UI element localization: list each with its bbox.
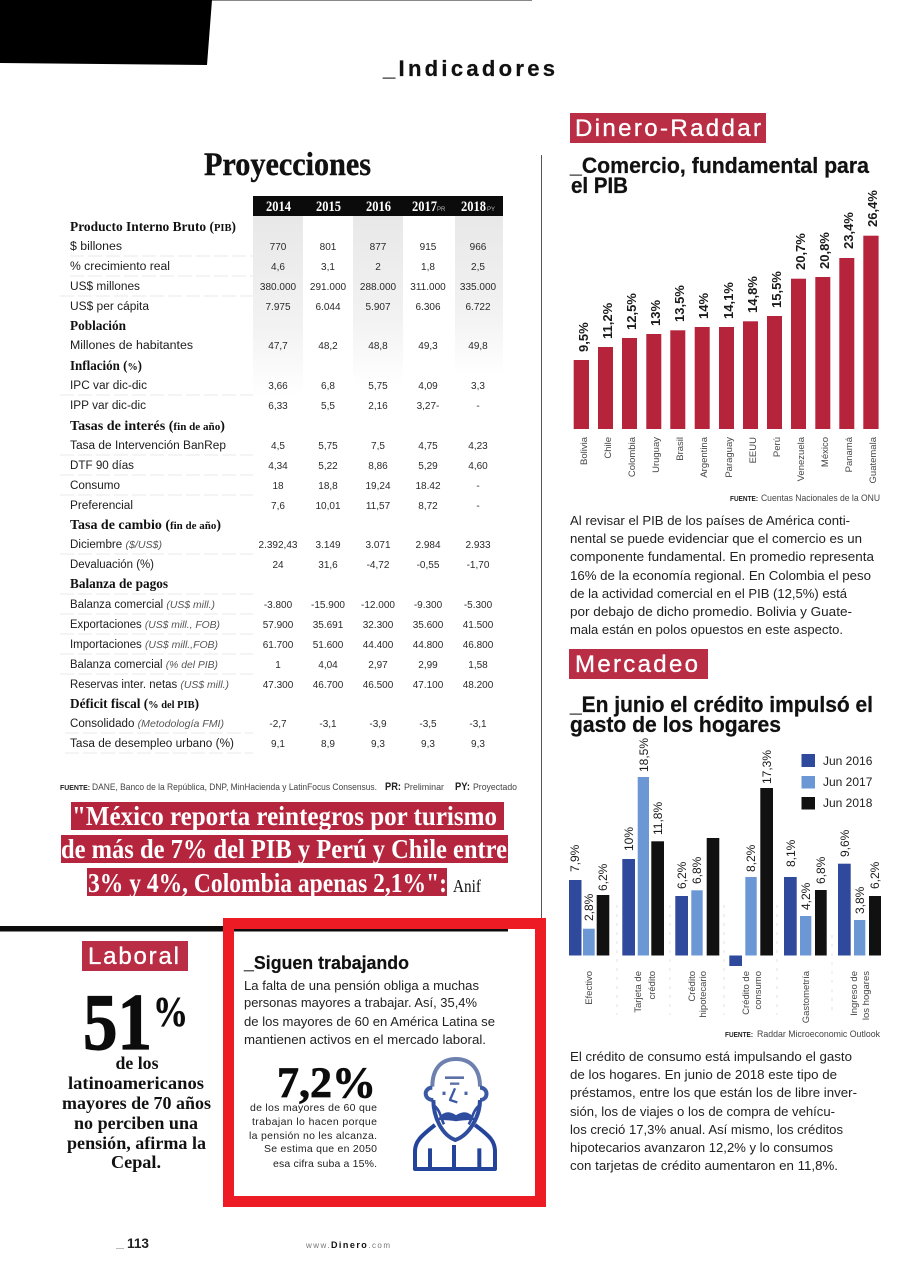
table source note — [60, 781, 517, 793]
section: balanza de pagos: 2,99 — [418, 660, 438, 671]
country labels — [579, 436, 879, 483]
callout: quote — [61, 801, 508, 898]
paragraph: comercio: por debajo de dicho promedio. Bolivia y Guate- — [570, 604, 852, 619]
section: deficit fiscal: -3,1 — [319, 719, 337, 730]
section: poblacion — [70, 319, 488, 352]
big number 51%: 51 — [83, 979, 152, 1067]
value labels: 6,8% — [690, 856, 704, 884]
laboral text: Cepal. — [111, 1152, 161, 1172]
panel: comercio — [569, 153, 880, 637]
country labels: Uruguay — [651, 437, 662, 473]
section: poblacion: 49,8 — [468, 341, 488, 352]
section: producto interno bruto: 6.722 — [465, 302, 491, 313]
stat description: trabajan lo hacen porque — [252, 1116, 377, 1128]
section: deficit fiscal: -2,7 — [269, 719, 287, 730]
stat description: la pensión no les alcanza. — [249, 1130, 377, 1142]
section: tasas de interes: DTF 90 días — [70, 460, 134, 472]
section: tasa de cambio: 2.392,43 — [259, 540, 298, 551]
section: inflacion: 3,27- — [417, 401, 439, 412]
section: producto interno bruto: 291.000 — [310, 282, 347, 293]
section: inflacion: 6,8 — [321, 381, 335, 392]
section: poblacion: Población — [70, 319, 126, 334]
tab: mercadeo: Mercadeo — [575, 651, 698, 678]
table header: 2014 — [266, 199, 291, 215]
value labels: 8,1% — [784, 839, 798, 867]
bar chart: credito — [568, 738, 882, 1023]
section: tasas de interes: - — [476, 501, 480, 512]
laboral text: latinoamericanos — [68, 1073, 204, 1093]
section: deficit fiscal — [70, 697, 487, 750]
table source note: Proyectado — [473, 782, 517, 793]
section: producto interno bruto: 380.000 — [260, 282, 297, 293]
big number 51%: % — [153, 990, 188, 1036]
section: tasa de cambio: Devaluación (%) — [70, 559, 154, 571]
panel: siguen trabajando — [228, 924, 540, 1202]
section: inflacion: 5,75 — [368, 381, 388, 392]
laboral text — [62, 1053, 211, 1172]
tab: dinero-raddar: Dinero-Raddar — [575, 115, 761, 142]
country labels: Guatemala — [868, 436, 879, 483]
footer url: www.Dinero.com — [305, 1240, 390, 1250]
table header: 2018 — [461, 199, 486, 215]
chart source: FUENTE: — [725, 1030, 753, 1039]
section: tasas de interes: Preferencial — [70, 500, 133, 512]
section: producto interno bruto: 311.000 — [410, 282, 446, 293]
section: inflacion: 3,3 — [471, 381, 485, 392]
chart source: Cuentas Nacionales de la ONU — [761, 493, 880, 504]
intro text: La falta de una pensión obliga a muchas — [244, 978, 479, 993]
section: balanza de pagos: 2,97 — [368, 660, 388, 671]
chart source: Raddar Microeconomic Outlook — [757, 1029, 880, 1040]
section: producto interno bruto: 2,5 — [471, 262, 485, 273]
stat description: esa cifra suba a 15%. — [273, 1158, 377, 1170]
value labels: 12,5% — [624, 293, 639, 330]
country labels: Colombia — [627, 436, 638, 477]
table shading — [253, 216, 503, 396]
section: balanza de pagos: Balanza comercial (% del PIB) — [70, 659, 218, 671]
section: tasa de cambio: 24 — [272, 560, 284, 571]
value labels: 14,8% — [745, 276, 760, 313]
category labels: Gastometría — [801, 970, 812, 1023]
section: inflacion: Inflación (%) — [70, 359, 142, 374]
section: poblacion: 48,2 — [318, 341, 338, 352]
value labels: 3,8% — [853, 886, 867, 914]
legend: Jun 2018 — [823, 796, 873, 810]
country labels: México — [820, 437, 831, 467]
stat description: de los mayores de 60 que — [250, 1102, 377, 1114]
value labels — [568, 738, 882, 921]
value labels: 15,5% — [769, 271, 784, 308]
section: deficit fiscal: 9,1 — [271, 739, 285, 750]
section: producto interno bruto — [70, 220, 497, 313]
bars jun 2018 — [597, 788, 881, 956]
country labels: Paraguay — [724, 437, 735, 478]
section: inflacion: IPP var dic-dic — [70, 400, 146, 412]
value labels: 10% — [622, 827, 636, 851]
section: poblacion: 47,7 — [268, 341, 288, 352]
value labels: 26,4% — [865, 190, 880, 227]
intro text: mantienen activos en el mercado laboral. — [244, 1032, 486, 1047]
category labels: Crédito — [687, 971, 698, 1002]
chart source: FUENTE: — [730, 494, 758, 503]
laboral text: de los — [116, 1053, 158, 1073]
section: balanza de pagos: 1 — [275, 660, 281, 671]
page number: 113 — [127, 1235, 149, 1251]
section: tasa de cambio — [70, 518, 491, 571]
group separators — [617, 905, 832, 1015]
heading: credito: gasto de los hogares — [570, 712, 781, 737]
section: tasas de interes: 18,8 — [318, 481, 338, 492]
red frame — [228, 924, 540, 1202]
section: deficit fiscal: 9,3 — [471, 739, 485, 750]
stat description: Se estima que en 2050 — [264, 1143, 377, 1155]
value labels: 9,6% — [838, 829, 852, 857]
section: producto interno bruto: 877 — [370, 242, 387, 253]
section: tasas de interes: 18.42 — [415, 481, 441, 492]
value labels: 17,3% — [760, 750, 774, 784]
section: balanza de pagos: 51.600 — [313, 640, 344, 651]
section: producto interno bruto: 1,8 — [421, 262, 435, 273]
section: producto interno bruto: $ billones — [70, 241, 122, 253]
section: tasa de cambio: 2.933 — [465, 540, 491, 551]
horizontal black rule — [0, 926, 508, 932]
section: poblacion: Millones de habitantes — [70, 340, 193, 352]
section: deficit fiscal: 8,9 — [321, 739, 335, 750]
table header: 2015 — [316, 199, 341, 215]
section: inflacion: 3,66 — [268, 381, 288, 392]
paragraph: comercio: Al revisar el PIB de los países de América conti- — [570, 513, 850, 528]
section: balanza de pagos: Balanza comercial (US$ mill.) — [70, 599, 215, 611]
top black corner block — [0, 0, 532, 65]
section: balanza de pagos — [70, 577, 494, 691]
paragraph: credito: sión, los de viajes o los de compra de vehícu- — [570, 1104, 835, 1119]
value labels: 4,2% — [799, 882, 813, 910]
section: tasas de interes — [70, 419, 488, 512]
section: tasas de interes: 8,72 — [418, 501, 438, 512]
section: balanza de pagos: 44.800 — [413, 640, 444, 651]
section: deficit fiscal: Déficit fiscal (% del PIB) — [70, 697, 199, 712]
section: balanza de pagos: 35.691 — [313, 620, 344, 631]
section: balanza de pagos: Balanza de pagos — [70, 577, 169, 592]
callout: quote: de más de 7% del PIB y Perú y Chile entre — [61, 834, 507, 864]
section: balanza de pagos: Reservas inter. netas (US$ mill.) — [70, 679, 229, 691]
table header — [253, 196, 503, 216]
category labels: consumo — [753, 971, 764, 1010]
section: tasas de interes: Consumo — [70, 480, 120, 492]
heading: credito — [569, 692, 873, 737]
table header: 2016 — [366, 199, 391, 215]
section: inflacion: IPC var dic-dic — [70, 380, 147, 392]
country labels: Argentina — [699, 436, 710, 478]
country labels: Venezuela — [796, 436, 807, 481]
table source note: PR: — [385, 781, 401, 793]
tab: laboral: Laboral — [88, 943, 179, 970]
section: balanza de pagos: 46.700 — [313, 680, 344, 691]
laboral text: no perciben una — [74, 1113, 198, 1133]
section: inflacion: 6,33 — [268, 401, 288, 412]
section: balanza de pagos: Exportaciones (US$ mill., FOB) — [70, 619, 220, 631]
legend — [802, 754, 873, 810]
category labels: Tarjeta de — [633, 971, 644, 1013]
page number — [116, 1235, 149, 1251]
heading: comercio — [569, 153, 870, 198]
value labels: 2,8% — [582, 893, 596, 921]
section: tasa de cambio: Tasa de cambio (fin de año) — [70, 518, 221, 533]
section: balanza de pagos: 47.100 — [413, 680, 444, 691]
paragraph: comercio — [570, 513, 875, 637]
section: balanza de pagos: 61.700 — [263, 640, 294, 651]
category labels: los hogares — [861, 971, 872, 1020]
section: balanza de pagos: 35.600 — [413, 620, 444, 631]
category labels — [584, 970, 872, 1023]
icon: bearded older man — [415, 1059, 495, 1169]
section: balanza de pagos: 4,04 — [318, 660, 338, 671]
value labels: 13,5% — [672, 285, 687, 322]
section: balanza de pagos: -15.900 — [311, 600, 345, 611]
callout: quote: "México reporta reintegros por turismo — [72, 801, 497, 831]
section: tasas de interes: 4,34 — [268, 461, 288, 472]
country labels: Bolivia — [579, 436, 590, 465]
section: balanza de pagos: 57.900 — [263, 620, 294, 631]
table header: PR — [437, 207, 446, 213]
section: balanza de pagos: -3.800 — [264, 600, 293, 611]
section: balanza de pagos: -5.300 — [464, 600, 493, 611]
intro text — [244, 978, 495, 1047]
callout: quote: Anif — [453, 876, 481, 896]
section: producto interno bruto: 966 — [470, 242, 487, 253]
table source note: FUENTE: — [60, 783, 90, 792]
value labels: 9,5% — [576, 322, 591, 352]
section: producto interno bruto: 915 — [420, 242, 437, 253]
intro text: personas mayores a trabajar. Así, 35,4% — [244, 995, 477, 1010]
heading: comercio: _Comercio, fundamental para — [569, 153, 870, 178]
section: producto interno bruto: 288.000 — [360, 282, 397, 293]
section title: _Indicadores — [382, 56, 555, 81]
value labels: 23,4% — [841, 212, 856, 249]
section: tasas de interes: 5,29 — [418, 461, 438, 472]
stat 7,2%: 7,2% — [277, 1060, 376, 1107]
section: balanza de pagos: 1,58 — [468, 660, 488, 671]
section: tasas de interes: 7,6 — [271, 501, 285, 512]
paragraph: credito: con tarjetas de crédito aumentaron en 11,8%. — [570, 1158, 838, 1173]
section: producto interno bruto: US$ millones — [70, 281, 140, 293]
section: balanza de pagos: 48.200 — [463, 680, 494, 691]
paragraph: credito: hipotecarios avanzaron 12,2% y lo consumos — [570, 1140, 834, 1155]
category labels: crédito — [647, 971, 658, 1000]
section: producto interno bruto: 6.306 — [415, 302, 441, 313]
section: tasa de cambio: 2.984 — [415, 540, 441, 551]
value labels: 20,8% — [817, 232, 832, 269]
section: tasa de cambio: 31,6 — [318, 560, 338, 571]
table header: 2017 — [412, 199, 437, 215]
heading: siguen trabajando: _Siguen trabajando — [243, 953, 409, 973]
section: balanza de pagos: -9.300 — [414, 600, 443, 611]
section: tasa de cambio: -0,55 — [417, 560, 440, 571]
section: producto interno bruto: 2 — [375, 262, 381, 273]
section: tasa de cambio: -1,70 — [467, 560, 490, 571]
table header: PY — [487, 207, 495, 213]
value labels: 13% — [648, 300, 663, 326]
category labels: Efectivo — [584, 971, 595, 1005]
laboral text: mayores de 70 años — [62, 1093, 211, 1113]
section: tasas de interes: 11,57 — [366, 501, 391, 512]
section: producto interno bruto: % crecimiento real — [70, 261, 170, 273]
bars jun 2016 — [569, 859, 851, 966]
heading: comercio: el PIB — [571, 173, 628, 198]
intro text: de los mayores de 60 en América Latina se — [244, 1014, 495, 1029]
table source note: DANE, Banco de la República, DNP, MinHacienda y LatinFocus Consensus. — [92, 782, 377, 793]
section: tasas de interes: Tasas de interés (fin de año) — [70, 419, 225, 434]
country labels: Panamá — [844, 436, 855, 472]
section: tasa de cambio: 3.071 — [365, 540, 391, 551]
section: tasas de interes: 8,86 — [368, 461, 388, 472]
section: tasas de interes: 18 — [272, 481, 284, 492]
heading: credito: _En junio el crédito impulsó el — [569, 692, 873, 717]
section: balanza de pagos: 47.300 — [263, 680, 294, 691]
section: tasas de interes: 4,60 — [468, 461, 488, 472]
section: producto interno bruto: 770 — [270, 242, 287, 253]
section: inflacion: 5,5 — [321, 401, 335, 412]
value labels: 11,2% — [600, 302, 615, 339]
section: poblacion: 49,3 — [418, 341, 438, 352]
table source note: PY: — [455, 781, 470, 793]
section: tasas de interes: 4,23 — [468, 441, 488, 452]
category labels: hipotecario — [698, 971, 709, 1017]
section: balanza de pagos: 46.800 — [463, 640, 494, 651]
value labels: 8,2% — [744, 844, 758, 872]
section: tasas de interes: 4,75 — [418, 441, 438, 452]
section: poblacion: 48,8 — [368, 341, 388, 352]
value labels: 6,2% — [868, 861, 882, 889]
paragraph: credito: los creció 17,3% anual. Así mismo, los créditos — [570, 1122, 844, 1137]
category labels: Ingreso de — [849, 971, 860, 1016]
panel: mercadeo — [568, 692, 882, 1173]
section: deficit fiscal: -3,1 — [469, 719, 487, 730]
section: tasas de interes: - — [476, 481, 480, 492]
paragraph: comercio: mala están en polos opuestos en este aspecto. — [570, 622, 843, 637]
section: inflacion: 4,09 — [418, 381, 438, 392]
column divider — [541, 155, 542, 918]
section: tasas de interes: 19,24 — [365, 481, 391, 492]
legend: Jun 2017 — [823, 775, 873, 789]
section: tasa de cambio: 3.149 — [315, 540, 341, 551]
value labels: 7,9% — [568, 844, 582, 872]
section: producto interno bruto: 3,1 — [321, 262, 335, 273]
paragraph: comercio: 16% de la economía regional. En Colombia el peso — [570, 568, 871, 583]
value labels: 11,8% — [651, 802, 665, 835]
category labels: Crédito de — [741, 971, 752, 1015]
value labels — [576, 190, 880, 352]
section: tasas de interes: 5,22 — [318, 461, 338, 472]
bar chart: comercio — [574, 190, 880, 483]
value labels: 14% — [696, 293, 711, 319]
section: producto interno bruto: US$ per cápita — [70, 301, 150, 313]
section: balanza de pagos: 41.500 — [463, 620, 494, 631]
section: balanza de pagos: Importaciones (US$ mill.,FOB) — [70, 639, 218, 651]
section: tasas de interes: 7,5 — [371, 441, 385, 452]
section: balanza de pagos: 32.300 — [363, 620, 394, 631]
section: inflacion — [70, 359, 485, 412]
country labels: Perú — [772, 437, 783, 457]
section: producto interno bruto: 4,6 — [271, 262, 285, 273]
section: deficit fiscal: 9,3 — [371, 739, 385, 750]
paragraph: credito: préstamos, entre los que están los de libre inver- — [570, 1085, 857, 1100]
country labels: EEUU — [748, 437, 759, 463]
section: producto interno bruto: 7.975 — [265, 302, 291, 313]
laboral text: pensión, afirma la — [67, 1133, 206, 1153]
table row separators — [60, 256, 253, 753]
section: tasas de interes: 10,01 — [315, 501, 341, 512]
section: tasa de cambio: -4,72 — [367, 560, 390, 571]
section: inflacion: - — [476, 401, 480, 412]
section: inflacion: 2,16 — [368, 401, 388, 412]
section: producto interno bruto: 801 — [320, 242, 337, 253]
paragraph: credito: El crédito de consumo está impulsando el gasto — [570, 1049, 852, 1064]
section: producto interno bruto: Producto Interno Bruto (PIB) — [70, 220, 236, 235]
paragraph: credito — [570, 1049, 857, 1173]
panel: proyecciones — [60, 147, 517, 793]
panel: laboral — [62, 941, 211, 1172]
value labels: 6,2% — [675, 861, 689, 889]
value labels: 18,5% — [637, 738, 651, 772]
section: balanza de pagos: 44.400 — [363, 640, 394, 651]
section: balanza de pagos: -12.000 — [361, 600, 395, 611]
paragraph: comercio: componente fundamental. En promedio representa — [570, 549, 875, 564]
legend: Jun 2016 — [823, 754, 873, 768]
table source note: Preliminar — [404, 782, 444, 793]
section: tasas de interes: Tasa de Intervención BanRep — [70, 440, 226, 452]
section: tasa de cambio: Diciembre ($/US$) — [70, 539, 162, 551]
bars jun 2017 — [583, 777, 865, 956]
heading: proyecciones: Proyecciones — [204, 147, 371, 183]
section: tasas de interes: 5,75 — [318, 441, 338, 452]
section: deficit fiscal: -3,9 — [369, 719, 387, 730]
section: producto interno bruto: 5.907 — [365, 302, 391, 313]
section: tasas de interes: 4,5 — [271, 441, 285, 452]
bars — [574, 236, 879, 429]
stat description — [249, 1102, 377, 1170]
section: deficit fiscal: Tasa de desempleo urbano (%) — [70, 738, 234, 750]
country labels: Chile — [603, 437, 614, 459]
section: balanza de pagos: 46.500 — [363, 680, 394, 691]
paragraph: credito: de los hogares. En junio de 2018 este tipo de — [570, 1067, 837, 1082]
callout: quote: 3% y 4%, Colombia apenas 2,1%": — [88, 868, 447, 898]
value labels: 6,2% — [596, 863, 610, 891]
paragraph: comercio: de la actividad comercial en el PIB (12,5%) está — [570, 586, 848, 601]
paragraph: comercio: nental se puede evidenciar que el comercio es un — [570, 531, 862, 546]
value labels: 6,8% — [814, 856, 828, 884]
section: deficit fiscal: -3,5 — [419, 719, 437, 730]
value labels: 20,7% — [793, 233, 808, 270]
value labels: 14,1% — [721, 282, 736, 319]
section: deficit fiscal: Consolidado (Metodología FMI) — [70, 718, 224, 730]
section: producto interno bruto: 6.044 — [315, 302, 341, 313]
section: producto interno bruto: 335.000 — [460, 282, 497, 293]
country labels: Brasil — [675, 437, 686, 461]
section: deficit fiscal: 9,3 — [421, 739, 435, 750]
